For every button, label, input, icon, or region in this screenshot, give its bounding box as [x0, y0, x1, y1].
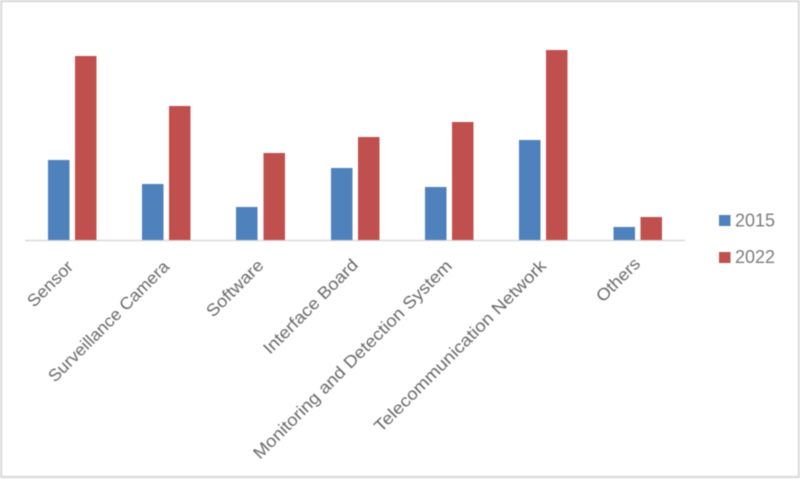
label: Software: Software	[202, 256, 267, 321]
bars: Software	[236, 153, 285, 240]
label: Interface Board: Interface Board	[259, 255, 362, 358]
bars: Telecommunication Network	[519, 50, 568, 240]
label: Telecommunication Network: Telecommunication Network	[370, 256, 550, 436]
label: Monitoring and Detection System: Monitoring and Detection System	[249, 256, 456, 463]
bars: Others	[614, 217, 662, 240]
x axis line	[25, 240, 685, 242]
legend item: 2022: 2022	[735, 247, 775, 267]
bars: Interface Board	[331, 137, 380, 240]
bars: Monitoring and Detection System	[425, 122, 474, 240]
label: Others: Others	[592, 254, 644, 306]
legend	[719, 210, 775, 267]
label: Sensor: Sensor	[23, 257, 77, 311]
legend item: 2015: 2015	[735, 210, 775, 230]
label: Surveillance Camera: Surveillance Camera	[44, 257, 173, 386]
category labels	[23, 254, 644, 463]
bars: Sensor	[48, 56, 96, 240]
bars: Surveillance Camera	[142, 106, 190, 240]
